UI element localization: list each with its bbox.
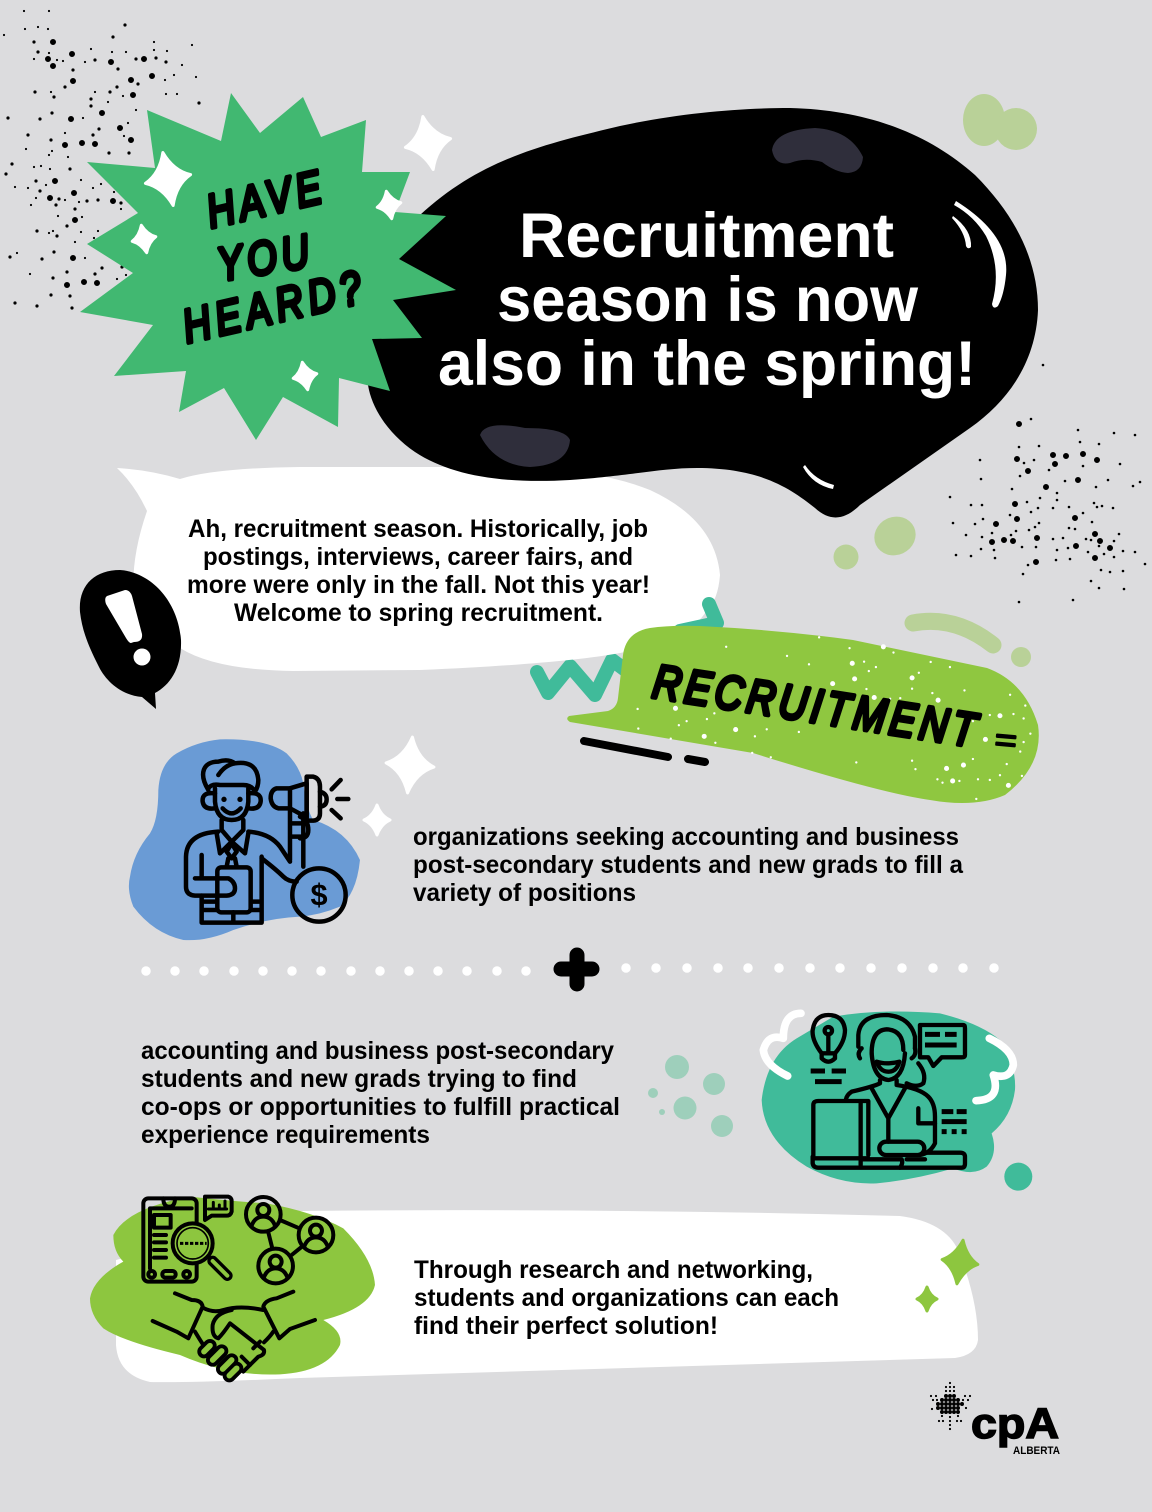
teal squiggle under intro bubble	[537, 660, 628, 695]
title: main heading: season is now	[497, 265, 919, 335]
title: main heading: Recruitment	[519, 201, 894, 271]
intro text: more were only in the fall. Not this year!	[187, 571, 650, 599]
student definition text: co-ops or opportunities to fulfill practical	[141, 1093, 620, 1121]
starburst: have you heard	[80, 93, 456, 440]
white speckles on green bubble	[638, 637, 1030, 799]
student definition text	[141, 1037, 620, 1149]
recruitment definition text: organizations seeking accounting and business	[413, 823, 959, 851]
icon: recruiter with megaphone	[129, 739, 360, 940]
icon: recruiter with megaphone: $	[310, 878, 328, 912]
recruitment definition text: post-secondary students and new grads to fill a	[413, 851, 964, 879]
title: main heading: also in the spring!	[438, 329, 976, 399]
intro text: postings, interviews, career fairs, and	[203, 543, 633, 571]
intro text: Welcome to spring recruitment.	[234, 599, 603, 627]
icon: plus sign	[561, 955, 592, 984]
bubble highlight: bottom blob	[480, 425, 570, 467]
icon: research, network and handshake	[90, 1197, 375, 1376]
main black speech bubble	[360, 108, 1038, 517]
sage swoosh above green bubble	[913, 621, 1031, 667]
recruitment definition text: variety of positions	[413, 879, 636, 907]
heading: have you heard	[178, 161, 367, 354]
teal dots decoration	[648, 1055, 733, 1137]
ink splatter right	[950, 365, 1145, 602]
conclusion text: students and organizations can each	[414, 1284, 839, 1312]
intro text: Ah, recruitment season. Historically, job	[188, 515, 648, 543]
conclusion text	[414, 1256, 839, 1340]
white speech bubble: intro	[117, 467, 720, 671]
recruitment definition text	[413, 823, 964, 907]
icon: student at laptop	[762, 1011, 1032, 1191]
teal squiggle over intro bubble	[680, 604, 717, 631]
dotted divider left	[146, 966, 526, 976]
dotted divider right	[626, 963, 994, 973]
student definition text: accounting and business post-secondary	[141, 1037, 614, 1065]
icon: maple leaf dots	[931, 1383, 970, 1429]
conclusion text: Through research and networking,	[414, 1256, 813, 1284]
white speech panel: conclusion	[116, 1210, 978, 1382]
intro text	[187, 515, 650, 627]
student definition text: experience requirements	[141, 1121, 430, 1149]
ink splatter top left	[4, 11, 199, 308]
sparkles on starburst	[130, 112, 456, 392]
bubble white arcs	[803, 201, 1006, 489]
heading: have you heard: HEARD?	[178, 261, 367, 354]
heading: recruitment =: RECRUITMENT	[649, 656, 983, 758]
heading: have you heard: HAVE	[202, 161, 327, 239]
heading: recruitment =: =	[993, 721, 1018, 759]
bubble highlight: top blob	[772, 128, 863, 173]
heading: have you heard: YOU	[213, 225, 314, 292]
title: main heading	[438, 201, 976, 399]
sage blobs under main bubble	[834, 510, 922, 570]
sparkles near recruiter	[364, 735, 436, 835]
logo: CPA Alberta	[931, 1383, 1060, 1457]
student definition text: students and new grads trying to find	[141, 1065, 577, 1093]
wordmark: cpA	[971, 1400, 1059, 1448]
icon: exclamation bubble	[80, 570, 181, 709]
green sparkles	[917, 1238, 981, 1311]
sage blobs top right	[963, 94, 1037, 150]
conclusion text: find their perfect solution!	[414, 1312, 718, 1340]
green speech bubble: recruitment	[567, 626, 1039, 803]
speed lines under green bubble	[584, 741, 705, 762]
wordmark: Alberta: ALBERTA	[1013, 1445, 1060, 1457]
